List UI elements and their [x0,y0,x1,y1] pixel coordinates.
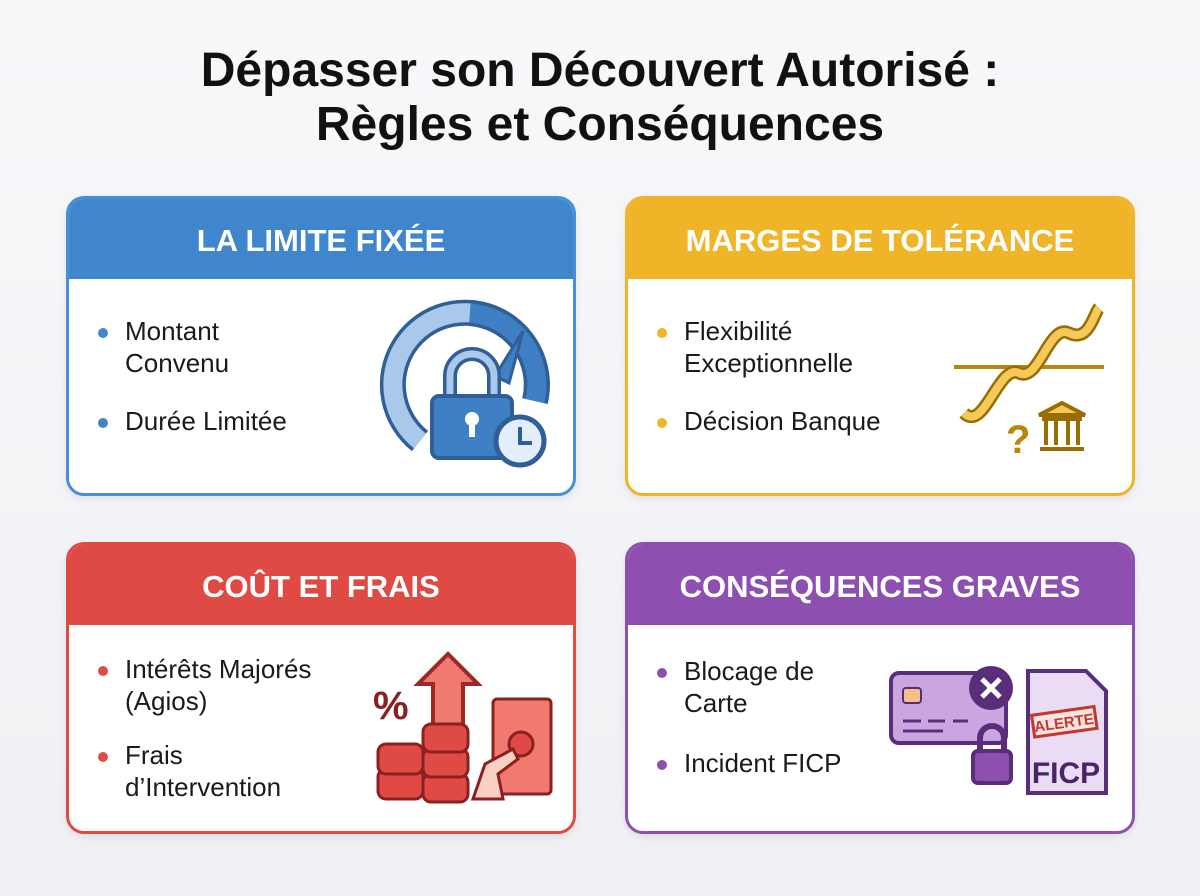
icon: card lock FICP doc: ALERTE [1033,711,1095,736]
icon: card lock FICP doc [889,666,1108,795]
panel: conséquences graves: Carte [684,688,748,718]
panel: la limite fixée [66,196,576,496]
header [69,545,573,625]
title: Dépasser son Découvert Autorisé : [201,44,999,97]
header: LA LIMITE FIXÉE [197,223,445,258]
icon: wave broken line bank [954,303,1104,462]
panel: marges de tolérance [625,196,1135,496]
panel: la limite fixée: Convenu [125,348,229,378]
panel: marges de tolérance: Exceptionnelle [684,348,853,378]
bullets [98,654,311,802]
panel: la limite fixée: Durée Limitée [125,406,287,436]
title [201,44,999,151]
panel: coût et frais: Intérêts Majorés [125,654,311,684]
header: MARGES DE TOLÉRANCE [686,223,1074,258]
panel: conséquences graves: Incident FICP [684,748,842,778]
header [69,199,573,279]
bullets [657,316,881,436]
bullets [657,656,842,778]
header: COÛT ET FRAIS [202,569,440,604]
panel: conséquences graves: Blocage de [684,656,814,686]
bullets [98,316,287,436]
icon: card lock FICP doc: FICP [1032,757,1100,790]
panel: la limite fixée: Montant [125,316,219,346]
header: CONSÉQUENCES GRAVES [680,569,1080,604]
header [628,545,1132,625]
icon: coins arrow money: % [373,684,409,728]
panel: coût et frais [66,542,576,834]
panel: marges de tolérance: Flexibilité [684,316,792,346]
panel: coût et frais: d’Intervention [125,772,281,802]
panel: marges de tolérance: Décision Banque [684,406,881,436]
icon: coins arrow money [373,651,552,804]
panel: coût et frais: Frais [125,740,183,770]
title: Règles et Conséquences [316,98,884,151]
icon: gauge lock clock [380,300,550,468]
panel: coût et frais: (Agios) [125,686,207,716]
header [628,199,1132,279]
icon: wave broken line bank: ? [1006,418,1030,462]
panel: conséquences graves [625,542,1135,834]
